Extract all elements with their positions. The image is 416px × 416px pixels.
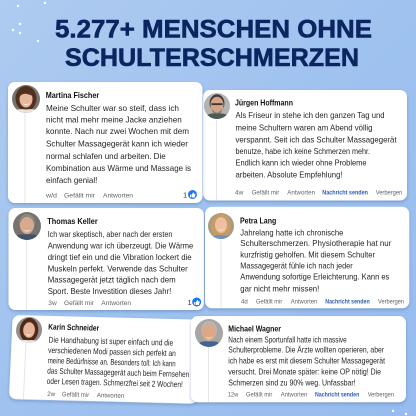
like count [188,298,201,307]
comment actions: 4w [235,190,244,196]
comment actions [241,298,404,305]
comment actions [48,300,131,307]
comment text: Nach einem Sportunfall hatte ich massive [228,334,347,344]
comment text [240,227,392,293]
comment text: Sport. Beste Investition dieses Jahr! [48,286,171,296]
title: 5.277+ MENSCHEN OHNE [55,16,372,44]
comment text: meine Schultern waren am Abend völlig [236,122,373,132]
comment text [48,229,194,296]
comment actions: Antworten [103,192,133,200]
comment text: Meine Schulter war so steif, dass ich [46,103,179,113]
icon: avatar Karin [15,317,43,343]
comment text: Muskeln perfekt. Verwende das Schulter [48,263,188,273]
comment actions: Verbergen [368,392,394,399]
comment actions: Antworten [101,300,131,307]
comment text: dringt tief ein und die Vibration lockert die [48,252,192,262]
comment text: einfach genial! [46,175,97,185]
comment actions [45,192,133,200]
like count [183,190,197,200]
comment text: Jahrelang hatte ich chronische [240,227,344,237]
comment text: Massagegerät jetzt täglich nach dem [48,275,176,285]
comment actions: Gefällt mir [64,300,95,307]
name: Michael Wagner [228,325,282,334]
comment text [47,335,191,389]
panel: comment Michael Wagner [191,316,406,402]
comment actions: w/d [45,192,57,200]
comment actions: Gefällt mir [62,391,90,399]
name: Jürgen Hoffmann [235,98,293,108]
icon: avatar Martina [12,85,40,113]
comment actions: Gefällt mir [64,192,96,200]
comment actions: 2w [47,391,56,398]
panel: comment Martina Fischer [8,82,202,203]
comment text: meine Bedürfnisse an. Besonders toll: Ich kann [47,355,176,368]
comment text: arbeiten. Absolute Empfehlung! [236,169,342,179]
name: Karin Schneider [48,323,100,333]
name: Thomas Keller [47,217,98,226]
comment text: Endlich kann ich wieder ohne Probleme [236,158,367,168]
comment actions: Verbergen [378,298,404,305]
panel: comment Jürgen Hoffmann [203,90,407,200]
comment actions [228,392,394,399]
comment text: oder Lesen tragen. Schmerzfrei seit 2 Wochen! [47,376,183,389]
comment actions: Gefällt mir [252,190,280,196]
comment actions: Nachricht senden [322,190,368,196]
panel: comment Petra Lang [205,207,409,308]
comment text: das Schulter Massagegerät auch beim Fernsehen [47,366,190,379]
comment actions: Antworten [97,392,125,400]
comment text: Schulter Massagegerät kann ich wieder [46,138,188,148]
comment actions: 12w [228,392,239,399]
comment text: verschiedenen Modi passen sich perfekt an [48,345,176,358]
comment text: nicht mal mehr meine Jacke anziehen [46,114,182,124]
like count: 1 [188,298,192,307]
comment text: Schulterprobleme. Die Ärzte wollten operieren, aber [228,345,384,355]
comment actions: Antworten [281,392,308,399]
comment text: Schmerzen sind zu 90% weg. Unfassbar! [228,377,356,387]
comment text: konnte. Nach nur zwei Wochen mit dem [46,126,189,136]
comment text [236,110,397,179]
comment text: Schulterschmerzen. Physiotherapie hat nur [240,238,392,248]
comment actions [47,391,125,400]
comment text: benutze, habe ich keine Schmerzen mehr. [236,146,370,156]
comment text: versucht. Drei Monate später: keine OP nötig! Die [228,366,381,376]
comment actions: Verbergen [376,190,403,196]
icon: avatar Petra [208,213,234,239]
comment actions: Gefällt mir [246,392,273,399]
icon: avatar Michael [195,319,223,347]
panel: comment Thomas Keller [8,208,204,310]
comment text: gar nicht mehr missen! [240,283,319,293]
panel: comment Karin Schneider [9,315,202,404]
comment text: Anwendung sofortige Erleichterung. Kann es [240,272,389,282]
title [55,16,372,72]
comment text: Als Friseur in stehe ich den ganzen Tag und [236,110,385,120]
comment text: Ich war skeptisch, aber nach der ersten [48,229,173,239]
comment text: Kombination aus Wärme und Massage is [46,163,191,173]
comment actions [235,190,403,196]
comment actions: Nachricht senden [315,392,359,399]
comment actions: Gefällt mir [256,298,283,305]
comment actions: Nachricht senden [325,298,370,305]
comment text: ich habe es erst mit diesem Schulter Massagegerät [228,356,386,366]
comment actions: 4d [241,298,248,305]
comment text: normal schlafen und arbeiten. Die [46,151,166,161]
comment text: Massagegerät fühle ich nach jeder [240,261,353,271]
comment actions: 3w [48,300,57,307]
comment text: verspannt. Seit ich das Schulter Massagegerät [236,134,397,144]
like count: 1 [183,190,187,200]
icon: avatar Thomas [13,212,41,240]
comment actions: Antworten [287,190,315,196]
comment text [228,334,386,387]
comment text: Anwendung war ich überzeugt. Die Wärme [48,241,194,251]
icon: avatar Jürgen [204,93,230,119]
comment text: Die Handhabung ist super einfach und die [48,335,174,348]
name: Martina Fischer [46,91,100,100]
title: SCHULTERSCHMERZEN [65,44,359,72]
comment actions: Antworten [291,298,318,305]
comment text [46,103,191,185]
comment text: kurzfristig geholfen. Mit diesem Schulter [240,249,375,259]
name: Petra Lang [240,217,276,226]
